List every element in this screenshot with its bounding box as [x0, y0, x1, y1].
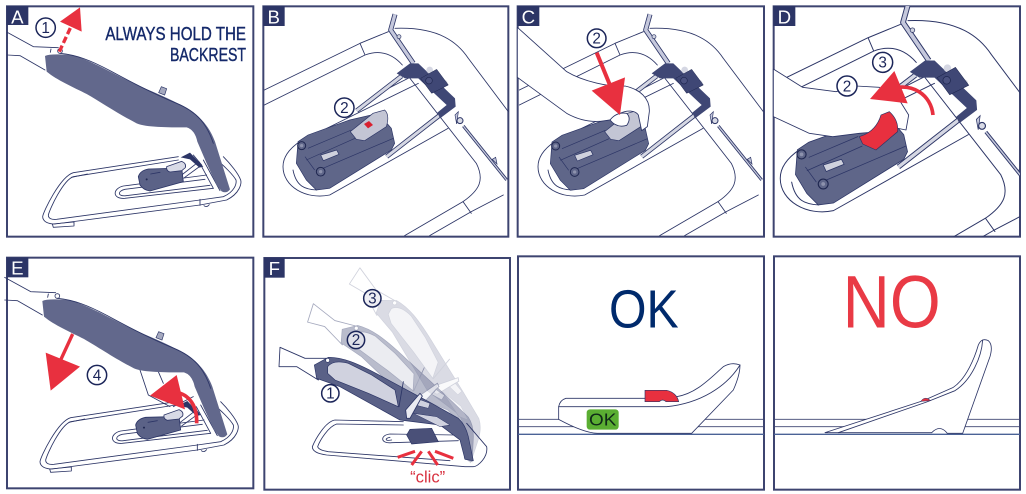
step number 1 — [322, 385, 339, 402]
illustration: position 3 ghost — [302, 267, 527, 463]
illustration: mechanism — [138, 153, 203, 191]
badge: D — [773, 6, 795, 27]
ground lines — [774, 419, 1020, 427]
step number 2: 2 — [843, 78, 851, 95]
step number 2 — [587, 29, 606, 48]
step number 3 — [873, 52, 893, 72]
arrow: curved lift — [870, 71, 933, 115]
panel: E lower backrest — [5, 257, 253, 488]
label: clic: “clic” — [410, 468, 445, 487]
heading: NO: NO — [843, 261, 941, 344]
arrow: lift upward — [59, 7, 82, 52]
illustration: hand — [773, 69, 909, 137]
illustration: enlarged frame and handle — [759, 5, 1026, 257]
illustration: red lever — [645, 390, 679, 402]
illustration: position 1 backrest — [279, 347, 473, 461]
heading: always hold the backrest: ALWAYS HOLD THE — [105, 23, 246, 44]
illustration: hand pressing — [517, 27, 649, 131]
illustration: frame rails and handle — [264, 14, 508, 236]
illustration: mechanism body — [296, 113, 395, 190]
illustration: seat frame base — [43, 157, 241, 227]
badge: B — [263, 6, 285, 27]
arrow: press down — [592, 53, 625, 115]
step number 1: 1 — [41, 20, 50, 37]
panel: B button — [263, 6, 508, 237]
step number 4 — [87, 365, 107, 385]
illustration: seat inner line — [838, 340, 983, 433]
step number 1 — [36, 18, 55, 37]
panel: C press button — [517, 6, 764, 237]
step number 2 — [837, 76, 857, 96]
ground lines — [518, 419, 764, 427]
illustration: grey button — [605, 110, 642, 141]
illustration: mechanism — [136, 401, 201, 439]
icon: red indicator — [364, 121, 373, 128]
panel: D lift red tab — [759, 5, 1026, 257]
illustration: click marks — [398, 451, 453, 465]
step number 1: 1 — [326, 385, 335, 402]
badge: A — [7, 6, 28, 27]
illustration: red tab — [859, 112, 898, 150]
heading: always hold the backrest — [105, 23, 246, 65]
heading: always hold the backrest: BACKREST — [170, 44, 246, 65]
arrow: push down — [46, 334, 80, 391]
step number 3: 3 — [878, 55, 887, 72]
badge: C: C — [522, 6, 535, 27]
badge: E: E — [11, 258, 24, 279]
illustration: seat frame base — [40, 402, 238, 472]
panel: OK correct position — [518, 256, 764, 490]
illustration: thumb — [610, 113, 629, 126]
step number 3: 3 — [368, 290, 377, 307]
indicator: green OK badge: OK — [589, 410, 617, 430]
illustration: enlarged mechanism body — [795, 118, 908, 205]
illustration: seat inner line — [559, 365, 740, 407]
badge: D: D — [778, 6, 791, 27]
arrow: curved release — [150, 375, 197, 423]
illustration: backrest — [7, 32, 230, 192]
badge: E — [7, 257, 28, 279]
illustration: small red lever — [921, 398, 931, 401]
step number 2 — [347, 331, 365, 349]
illustration: seat frame base — [312, 420, 487, 467]
step number 2: 2 — [352, 332, 360, 349]
illustration: hand lines — [140, 370, 193, 407]
step number 2 — [335, 98, 354, 117]
badge: F: F — [269, 258, 280, 279]
illustration: seat profile — [559, 364, 740, 433]
badge: B: B — [267, 6, 280, 27]
panel: A hold the backrest — [7, 6, 253, 237]
illustration: mechanism — [407, 428, 438, 444]
badge: A: A — [11, 6, 24, 27]
badge: C — [517, 6, 539, 27]
step number 4: 4 — [93, 367, 102, 384]
step number 2: 2 — [592, 31, 601, 48]
step number 2: 2 — [340, 100, 349, 117]
step number 3 — [364, 290, 381, 307]
illustration: position 2 ghost — [284, 303, 501, 462]
illustration: grey button — [350, 110, 388, 141]
illustration: frame rails and handle — [519, 14, 763, 236]
illustration: backrest — [5, 277, 227, 437]
illustration: mechanism body — [550, 114, 649, 190]
badge: F — [264, 258, 285, 279]
panel: NO wrong position — [774, 256, 1020, 490]
panel: F backrest positions — [264, 258, 527, 490]
heading: OK: OK — [609, 281, 679, 340]
illustration: raised seat profile — [825, 340, 991, 433]
